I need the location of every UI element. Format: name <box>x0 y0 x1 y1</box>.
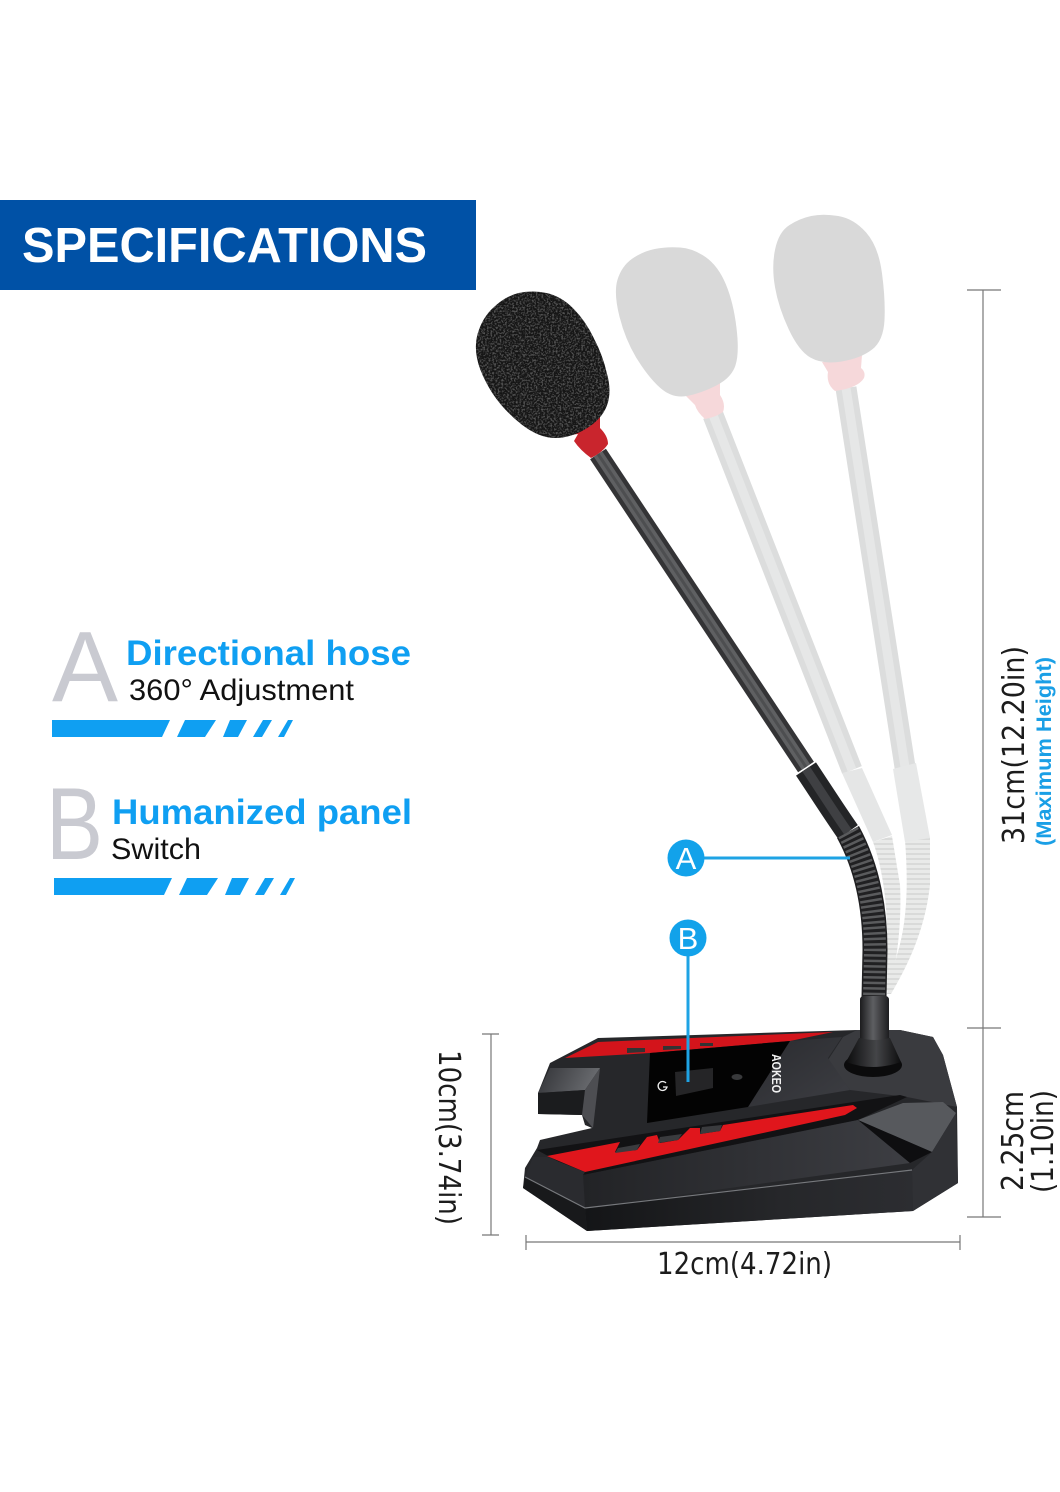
feature A striped bar <box>52 720 293 737</box>
ghost rod <box>846 388 905 767</box>
feature B: humanized panel <box>46 767 412 895</box>
lower red strip <box>547 1105 857 1172</box>
feature B title: Humanized panel <box>112 793 412 832</box>
heading text: SPECIFICATIONS <box>22 219 427 273</box>
upper red strip <box>565 1032 833 1058</box>
power switch <box>675 1068 713 1096</box>
ghost foam <box>617 249 736 395</box>
ghost collar <box>683 380 724 419</box>
microphone head <box>478 294 608 458</box>
feature B striped bar <box>54 878 295 895</box>
foam windscreen <box>478 294 608 436</box>
letter A: A <box>52 611 118 723</box>
ghost gooseneck <box>873 836 900 992</box>
heading banner: specifications <box>0 200 476 290</box>
width dimension line <box>526 1235 960 1250</box>
badge letter A: A <box>676 841 697 876</box>
badge A <box>668 840 704 876</box>
left facets <box>525 1157 585 1208</box>
microphone base <box>523 996 958 1231</box>
front face <box>583 1120 910 1208</box>
right height dimension lines <box>967 290 1001 1217</box>
base body <box>523 1030 958 1231</box>
mic socket ring <box>844 1053 902 1077</box>
microphone stem <box>598 454 875 998</box>
rod <box>598 454 806 767</box>
dark band around lower strip <box>537 1095 907 1175</box>
indicator light <box>732 1074 742 1080</box>
letter B: B <box>46 767 103 881</box>
callout B <box>670 920 706 1082</box>
feature B description: Switch <box>111 833 201 866</box>
right light facet <box>858 1102 956 1152</box>
sleeve <box>806 769 848 832</box>
mic collar <box>860 996 889 1040</box>
ghost sleeve <box>842 768 892 842</box>
leader line A <box>700 856 850 860</box>
ghost microphone position 1 <box>617 249 900 992</box>
base height inches label: (1.10in) <box>1026 1090 1060 1193</box>
depth label: 10cm(3.74in) <box>431 1050 466 1225</box>
right side facet <box>912 1113 958 1211</box>
callout A <box>668 840 850 876</box>
ghost collar <box>822 355 865 391</box>
ghost foam <box>775 216 883 361</box>
black control panel <box>647 1041 790 1123</box>
height label 31cm: 31cm(12.20in) <box>997 646 1032 844</box>
lower grey buttons <box>615 1125 722 1153</box>
depth dimension line <box>482 1034 499 1235</box>
feature A: directional hose <box>52 611 411 737</box>
leader line B <box>686 950 690 1082</box>
ghost gooseneck <box>887 838 930 994</box>
ghost rod <box>713 415 852 770</box>
black triangle facet <box>858 1120 932 1163</box>
maximum height note: (Maximum Height) <box>1033 657 1056 846</box>
ghost sleeve <box>893 763 930 842</box>
right grey control panel <box>748 1037 850 1107</box>
brand label: AOKEO <box>769 1054 784 1093</box>
lower front face <box>585 1170 913 1231</box>
badge B <box>670 920 706 956</box>
mic socket cone <box>846 1038 901 1067</box>
gooseneck <box>848 832 875 998</box>
ghost microphone position 2 <box>775 216 930 994</box>
power icon <box>658 1081 667 1090</box>
base height label: 2.25cm <box>996 1091 1031 1191</box>
edge highlight <box>525 1170 912 1208</box>
feature A description: 360° Adjustment <box>129 674 355 707</box>
width label: 12cm(4.72in) <box>657 1247 832 1282</box>
red collar <box>562 414 608 458</box>
notch block <box>538 1068 600 1093</box>
feature A title: Directional hose <box>126 634 411 673</box>
badge letter B: B <box>678 921 698 956</box>
top right deck <box>828 1030 957 1107</box>
upper grey buttons <box>627 1043 713 1053</box>
